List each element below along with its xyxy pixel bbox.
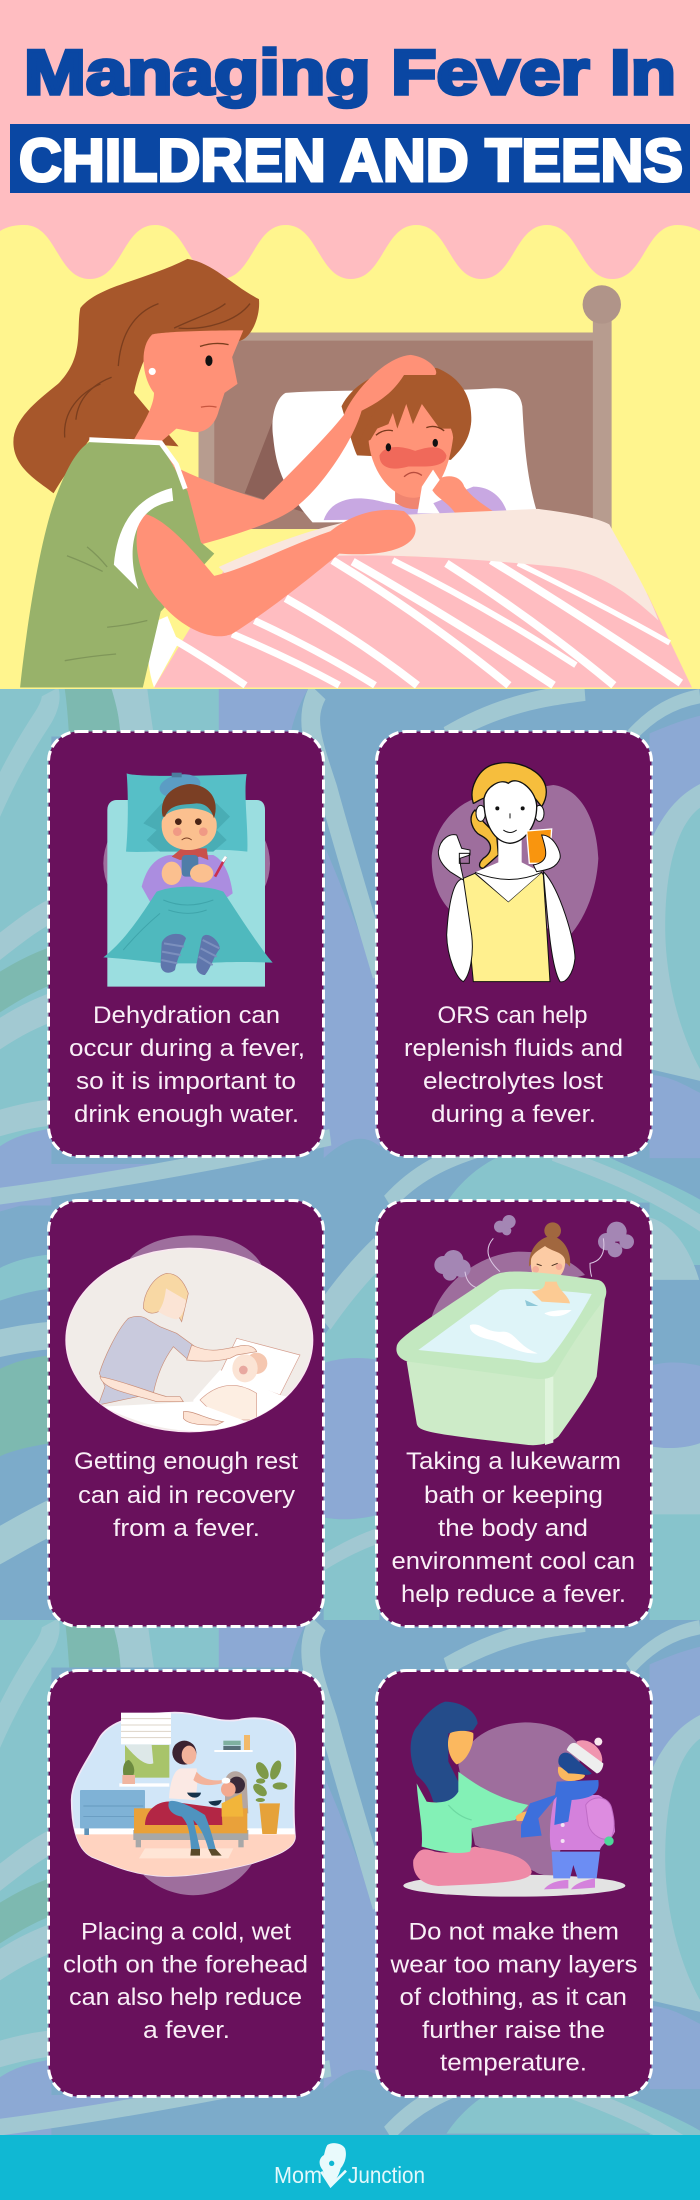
text: ORS: replenish fluids and xyxy=(404,1035,623,1062)
text: cold cloth xyxy=(63,1918,308,2044)
text: cold cloth: a fever. xyxy=(143,2017,230,2044)
text: rest: Getting enough rest xyxy=(74,1448,298,1475)
bed headboard xyxy=(199,285,621,531)
text: cold cloth: can also help reduce xyxy=(69,1984,302,2011)
text: clothing layers xyxy=(389,1918,638,2076)
logo icon xyxy=(320,2143,346,2186)
logo: Mom xyxy=(274,2162,322,2188)
sick child xyxy=(324,367,508,520)
text: dehydration: drink enough water. xyxy=(74,1101,299,1128)
header background xyxy=(0,0,700,689)
text: clothing layers: temperature. xyxy=(440,2050,587,2076)
text: lukewarm bath: the body and xyxy=(438,1515,588,1542)
text: clothing layers: further raise the xyxy=(422,2017,605,2044)
mother xyxy=(13,259,436,688)
text: clothing layers: Do not make them xyxy=(408,1918,619,1946)
icon: mother checking resting child xyxy=(66,1235,313,1437)
text: rest xyxy=(74,1448,298,1542)
text: cold cloth: Placing a cold, wet xyxy=(81,1918,291,1946)
logo xyxy=(274,2143,425,2188)
title banner: CHILDREN AND TEENS xyxy=(19,127,683,194)
text: dehydration xyxy=(69,1002,305,1128)
panel: dehydration xyxy=(48,732,324,1156)
text: dehydration: so it is important to xyxy=(76,1068,296,1095)
swirl background xyxy=(0,689,700,2196)
pillow xyxy=(245,388,540,522)
text: ORS: ORS can help xyxy=(438,1002,588,1029)
text: rest: from a fever. xyxy=(113,1515,260,1542)
panel: rest xyxy=(48,1200,324,1626)
text: rest: can aid in recovery xyxy=(78,1482,295,1509)
text: clothing layers: wear too many layers xyxy=(389,1952,638,1978)
footer band xyxy=(0,2135,700,2200)
text: lukewarm bath: environment cool can xyxy=(392,1548,635,1575)
icon: mother adjusting child's scarf xyxy=(403,1702,625,1897)
panel: clothing layers xyxy=(376,1670,652,2096)
title xyxy=(10,38,690,194)
text: dehydration: occur during a fever, xyxy=(69,1035,305,1062)
striped blanket xyxy=(147,509,692,688)
text: ORS: during a fever. xyxy=(431,1101,596,1128)
panel: ORS xyxy=(376,732,652,1156)
text: lukewarm bath: bath or keeping xyxy=(424,1482,603,1509)
text: cold cloth: cloth on the forehead xyxy=(63,1952,308,1978)
icon: mother placing cloth on child's forehead xyxy=(65,1713,305,1895)
text: clothing layers: of clothing, as it can xyxy=(400,1984,627,2011)
panel: cold cloth xyxy=(48,1670,324,2096)
title line one: Managing Fever In xyxy=(24,38,676,108)
icon: woman in bath tub with steam xyxy=(396,1215,634,1445)
text: lukewarm bath: help reduce a fever. xyxy=(401,1581,626,1608)
text: lukewarm bath: Taking a lukewarm xyxy=(406,1448,621,1475)
text: lukewarm bath xyxy=(392,1448,635,1608)
illustration: mother caring for sick child in bed xyxy=(13,259,692,688)
text: dehydration: Dehydration can xyxy=(93,1002,280,1029)
text: ORS: electrolytes lost xyxy=(423,1068,603,1095)
logo: Junction xyxy=(348,2162,425,2188)
icon: woman drinking ORS xyxy=(432,763,598,982)
panel: lukewarm bath xyxy=(376,1200,652,1626)
text: ORS xyxy=(404,1002,623,1128)
icon: sick boy in bed drinking xyxy=(103,771,273,987)
